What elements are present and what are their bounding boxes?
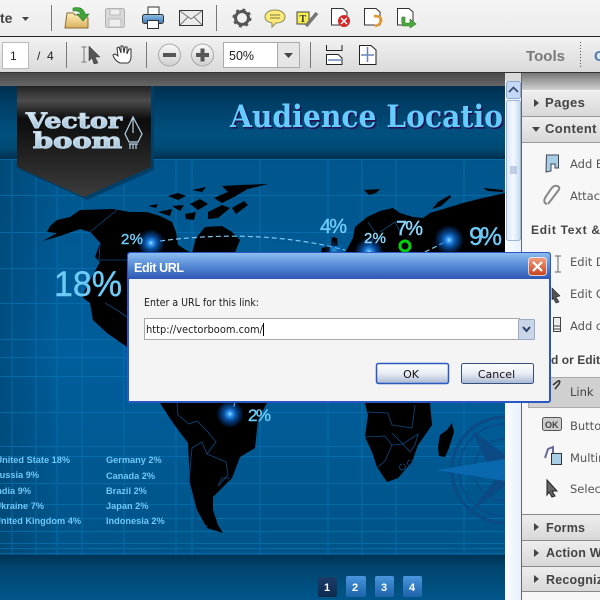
title: Audience Locatio (229, 99, 503, 135)
selected marker (400, 241, 410, 251)
dark strip above page (0, 73, 505, 86)
dialog close button (528, 258, 546, 276)
percentage labels: 2% (248, 406, 271, 425)
icon: paperclip (544, 186, 559, 204)
icon: OK button: OK (545, 420, 559, 430)
percentage labels: 7% (396, 218, 423, 240)
icon: bookmark (546, 155, 558, 172)
connection lines (160, 236, 445, 410)
dialog prompt: Enter a URL for this link: (144, 296, 259, 309)
icon: multimedia (545, 447, 562, 464)
icon: fit page (360, 46, 376, 64)
country list right column: Indonesia 2% (106, 516, 165, 526)
world map (43, 184, 505, 533)
compass rose (437, 416, 505, 524)
panel row: Content (522, 117, 600, 143)
percentage labels (54, 216, 502, 425)
logo wordmark: boom (33, 128, 122, 153)
scroll up button (506, 82, 520, 98)
icon: mail (180, 10, 202, 26)
URL input (144, 318, 520, 340)
percentage labels: 2% (364, 230, 386, 247)
panel row: Forms: Forms (546, 521, 585, 535)
toolbar row 1 (0, 0, 600, 37)
North America (43, 184, 268, 350)
percentage labels: 18% (54, 265, 122, 304)
panel row: Link selected (528, 378, 600, 408)
icon: comment bubble (265, 10, 285, 27)
page number box (2, 42, 28, 68)
icon: document delete (332, 8, 350, 27)
pagination buttons: 1 (324, 582, 330, 594)
icon: gear (234, 10, 250, 26)
page count: / 4 (37, 49, 54, 63)
icon: select arrow (547, 480, 557, 497)
menu caret (22, 17, 29, 21)
pagination buttons: 4 (409, 582, 416, 594)
header band (0, 86, 505, 159)
pagination buttons (318, 576, 422, 597)
dialog: Edit URL (127, 252, 551, 403)
zoom combo box (224, 42, 300, 68)
icon: save (106, 8, 124, 28)
panel row: Pages (522, 91, 600, 117)
icon: highlight note (297, 12, 317, 26)
location glows (137, 225, 464, 428)
icon: zoom out (158, 44, 180, 66)
South America (160, 403, 267, 533)
pen nib icon (125, 117, 142, 149)
tools label: Tools (526, 48, 565, 65)
panel row: Recognize (522, 566, 600, 592)
section heading: add or edit: d or Edit (551, 353, 600, 367)
URL dropdown button (518, 320, 534, 340)
country borders (90, 210, 418, 527)
panel row: Forms (522, 514, 600, 540)
icon: fit width (326, 45, 342, 64)
section heading: edit text: Edit Text & (531, 223, 600, 237)
document page: Audience Location slide (0, 86, 558, 600)
menu label: te (0, 10, 13, 26)
Madagascar (438, 423, 454, 457)
icon: open folder (65, 8, 89, 28)
Africa (365, 403, 432, 482)
scrollbar (505, 73, 521, 600)
Cancel button (462, 364, 534, 384)
country list right column: Canada 2% (106, 471, 155, 481)
logo wordmark (25, 112, 123, 149)
icon: text cursor beside dialog (555, 256, 561, 272)
icon: hand tool (113, 46, 131, 63)
country list right column: Japan 2% (106, 501, 148, 511)
panel row: Link selected: Link (570, 385, 594, 399)
OK button (376, 364, 448, 384)
ribbon logo (17, 86, 154, 200)
country list right column: Germany 2% (106, 455, 162, 465)
icon: add object doc (554, 318, 560, 332)
icon: print (142, 7, 164, 28)
pagination buttons: 3 (381, 582, 387, 594)
label: attach: Attac (570, 189, 600, 203)
percentage labels: 4% (320, 216, 347, 238)
footer band (0, 555, 505, 600)
OK button: OK (403, 368, 420, 381)
dialog title bar (128, 253, 550, 279)
country list left column (0, 455, 81, 526)
dialog title bar: Edit URL (134, 261, 184, 275)
icon: document export (398, 8, 416, 28)
panel row: Content: Content (545, 121, 597, 136)
logo wordmark: Vector (25, 108, 123, 133)
zoom combo box: 50% (229, 49, 254, 63)
icon: document rotate (364, 8, 381, 26)
map background (0, 159, 505, 555)
URL input: http://vectorboom.com/ (146, 323, 263, 336)
panel row: Action Wizard (522, 540, 600, 566)
icon: select tool (82, 46, 100, 64)
country list right column (106, 455, 165, 526)
icon: highlight note: T (300, 14, 306, 25)
right tools panel (521, 73, 600, 600)
icon: zoom in (192, 44, 214, 66)
country list right column: Brazil 2% (106, 486, 147, 496)
Cancel button: Cancel (478, 368, 515, 381)
title: Audience Locatio (231, 100, 504, 136)
page number box: 1 (10, 49, 17, 63)
title (230, 104, 504, 129)
panel row: Pages: Pages (545, 95, 585, 110)
icon: OK button (542, 418, 562, 430)
percentage labels: 2% (121, 231, 143, 248)
Eurasia (321, 188, 505, 253)
pagination buttons: 2 (352, 582, 358, 594)
toolbar row 2 (0, 37, 600, 73)
icon: pointer beside dialog (552, 288, 560, 303)
scroll thumb (506, 100, 520, 240)
percentage labels: 9% (469, 223, 502, 251)
